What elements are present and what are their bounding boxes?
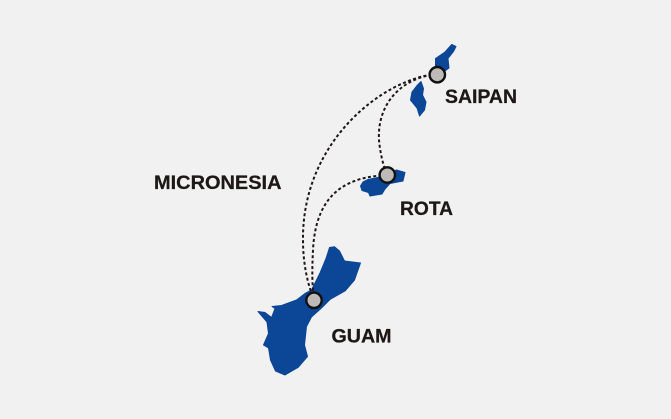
island: Tinian <box>410 82 426 116</box>
dotted flight routes <box>303 74 437 300</box>
island: Rota <box>360 170 405 196</box>
island: Saipan <box>436 44 456 71</box>
marker: Guam <box>306 293 322 308</box>
label: GUAM: GUAM <box>332 326 392 348</box>
label: ROTA: ROTA <box>400 198 453 220</box>
marker: Rota <box>380 167 395 183</box>
island: Guam <box>258 247 360 375</box>
marker: Saipan <box>430 67 445 82</box>
label: SAIPAN: SAIPAN <box>445 86 517 108</box>
label: MICRONESIA: MICRONESIA <box>154 172 282 194</box>
